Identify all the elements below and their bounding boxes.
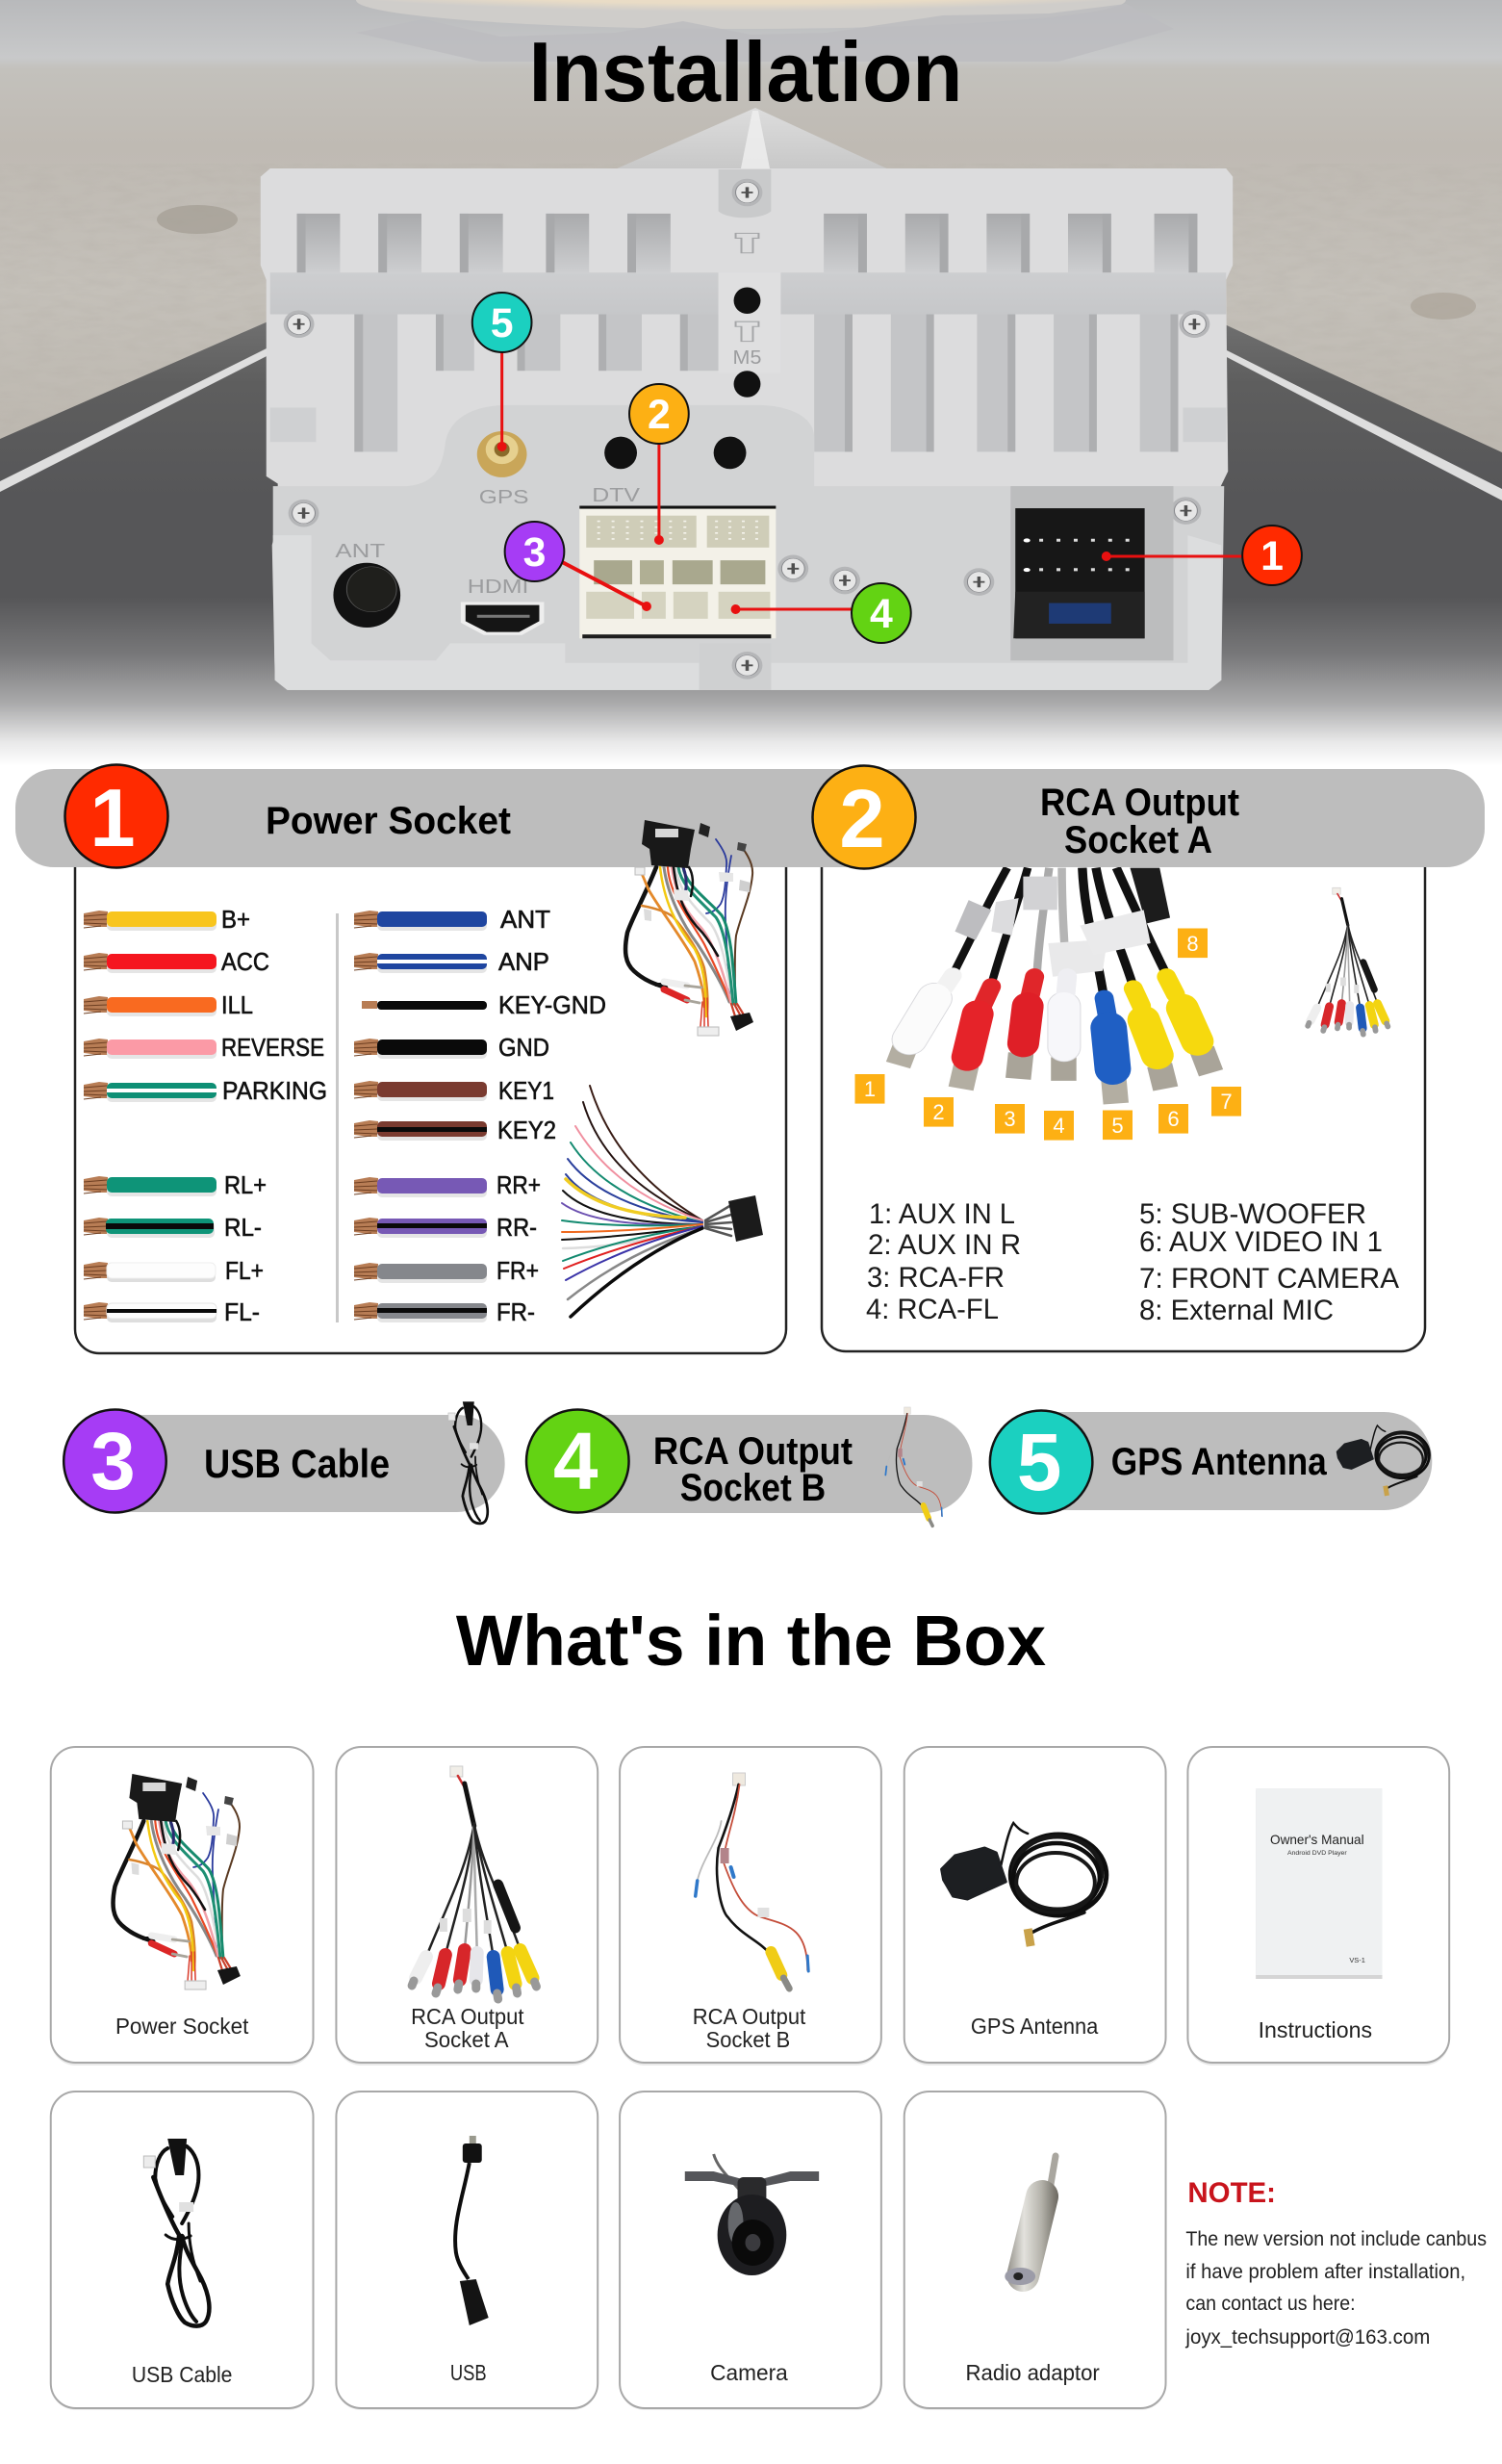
heading: RCA Output Socket A: Socket A bbox=[1064, 819, 1212, 861]
device port labels: ANT bbox=[335, 541, 385, 562]
card: USB Cable bbox=[51, 2092, 314, 2410]
label bbox=[411, 2004, 524, 2052]
photo bbox=[1005, 2156, 1056, 2285]
callout 4: RCA B bbox=[731, 583, 911, 643]
RCA legend: 2: AUX IN R bbox=[868, 1229, 1021, 1261]
card: Power Socket bbox=[51, 1747, 314, 2066]
RCA legend: 7: FRONT CAMERA bbox=[1139, 1263, 1399, 1295]
manual booklet bbox=[1256, 1788, 1383, 1979]
wire labels: FR- bbox=[496, 1297, 535, 1326]
label: Socket A bbox=[424, 2027, 509, 2052]
wire labels: RR- bbox=[496, 1213, 537, 1242]
number tags: 4 bbox=[1053, 1114, 1065, 1138]
label: Camera bbox=[710, 2360, 788, 2385]
section 3: USB Cable: 3 bbox=[90, 1416, 136, 1506]
icon: RCA B cable bbox=[885, 1407, 942, 1526]
wire labels: FR+ bbox=[496, 1256, 539, 1285]
harness fan of wires with connector bbox=[562, 1086, 763, 1317]
RCA legend: 4: RCA-FL bbox=[866, 1294, 999, 1325]
card: Camera bbox=[620, 2092, 881, 2410]
badge 1: 1 bbox=[89, 773, 136, 864]
wire labels: REVERSE bbox=[221, 1033, 324, 1062]
label: Socket B bbox=[706, 2027, 790, 2052]
callout 3: USB bbox=[505, 522, 651, 611]
callout 5: GPS bbox=[472, 293, 532, 451]
socket plate bbox=[273, 405, 1224, 690]
panel: power socket wiring bbox=[75, 861, 786, 1353]
number tags: 5 bbox=[1111, 1114, 1124, 1138]
card: RCA Output Socket B bbox=[620, 1747, 881, 2066]
title: Installation: Installation bbox=[529, 25, 962, 119]
wires: right column bbox=[354, 911, 487, 1322]
callout 1: power: 1 bbox=[1260, 533, 1284, 579]
card: USB bbox=[336, 2092, 598, 2410]
wire labels: FL- bbox=[224, 1297, 260, 1326]
RCA legend: 5: SUB-WOOFER bbox=[1139, 1198, 1366, 1230]
number tags: 3 bbox=[1004, 1107, 1016, 1131]
header bar: sections 1 and 2 bbox=[15, 764, 1485, 868]
heading: RCA Output Socket A bbox=[1040, 782, 1239, 861]
manual booklet: Owner's Manual bbox=[1270, 1833, 1364, 1847]
callout 4: RCA B: 4 bbox=[870, 591, 893, 637]
RCA legend: 1: AUX IN L bbox=[869, 1198, 1015, 1230]
photo bbox=[143, 2139, 209, 2326]
section 4: RCA Output Socket B: Socket B bbox=[680, 1467, 826, 1509]
photo bbox=[455, 2136, 489, 2325]
ANT port bbox=[333, 563, 400, 628]
manual booklet: VS-1 bbox=[1349, 1956, 1365, 1964]
RCA legend: 3: RCA-FR bbox=[867, 1262, 1005, 1294]
manual booklet: Android DVD Player bbox=[1287, 1850, 1348, 1857]
label: GPS Antenna bbox=[971, 2014, 1099, 2039]
photo bbox=[685, 2154, 819, 2275]
device port labels: HDMI bbox=[468, 577, 529, 598]
wire labels bbox=[221, 905, 606, 1326]
wire labels: B+ bbox=[221, 905, 250, 934]
number tags: 8 bbox=[1186, 932, 1199, 956]
wire labels: KEY-GND bbox=[498, 990, 606, 1019]
panel: RCA output socket A bbox=[822, 861, 1425, 1351]
card: Radio adaptor bbox=[904, 2092, 1166, 2410]
number tags: 1 bbox=[864, 1077, 876, 1101]
wire labels: RL- bbox=[224, 1213, 262, 1242]
callout 1: power bbox=[1102, 526, 1302, 585]
section 3: USB Cable: USB Cable bbox=[204, 1441, 390, 1486]
section 5: GPS Antenna: GPS Antenna bbox=[1111, 1441, 1327, 1483]
divider bbox=[336, 913, 339, 1322]
heading: Power Socket: Power Socket bbox=[266, 800, 511, 842]
photo bbox=[696, 1773, 808, 1989]
RCA legend: 8: External MIC bbox=[1139, 1295, 1334, 1326]
icon: USB cable bbox=[448, 1401, 488, 1524]
harness photo overlapping bar bbox=[625, 820, 753, 1036]
number tags: 7 bbox=[1220, 1090, 1233, 1114]
background: road scene bbox=[0, 0, 1502, 775]
title: What's in the Box: What's in the Box bbox=[456, 1601, 1046, 1681]
device port labels: GPS bbox=[479, 487, 529, 508]
callout 2: RCA A: 2 bbox=[648, 392, 671, 438]
photo bbox=[412, 1766, 536, 1999]
power socket (black) bbox=[1010, 486, 1173, 660]
section 3: USB Cable bbox=[64, 1401, 505, 1524]
wire labels: ILL bbox=[221, 990, 253, 1019]
callout 3: USB: 3 bbox=[523, 529, 546, 576]
wire labels: KEY1 bbox=[498, 1076, 554, 1105]
heading: RCA Output Socket A: RCA Output bbox=[1040, 782, 1239, 824]
note text: The new version not include canbus bbox=[1185, 2228, 1487, 2250]
wires: left column bbox=[84, 911, 216, 1322]
label: Instructions bbox=[1259, 2017, 1372, 2042]
note text: if have problem after installation, bbox=[1185, 2261, 1465, 2283]
centre strip with holes bbox=[719, 169, 780, 398]
wire labels: RR+ bbox=[496, 1170, 541, 1199]
wire labels: RL+ bbox=[224, 1170, 267, 1199]
number tags bbox=[854, 928, 1241, 1141]
HDMI port bbox=[461, 603, 544, 635]
device port labels: M5 bbox=[733, 347, 761, 369]
device: head unit rear panel bbox=[261, 168, 1233, 690]
fins: recessed band and top comb bbox=[270, 214, 1226, 315]
section 4: RCA Output Socket B: 4 bbox=[553, 1416, 598, 1506]
number tags: 6 bbox=[1167, 1107, 1180, 1131]
section 5: GPS Antenna bbox=[990, 1411, 1432, 1513]
badge 1 bbox=[65, 764, 167, 868]
card: GPS Antenna bbox=[904, 1747, 1166, 2066]
screws bbox=[284, 179, 1209, 680]
icon: GPS antenna bbox=[1337, 1425, 1429, 1496]
wire labels: ACC bbox=[221, 947, 269, 976]
callout 5: GPS: 5 bbox=[491, 300, 514, 346]
GPS connector bbox=[477, 431, 527, 477]
label: USB bbox=[450, 2360, 487, 2385]
RCA legend: 6: AUX VIDEO IN 1 bbox=[1139, 1226, 1383, 1258]
callout 2: RCA A bbox=[629, 384, 689, 545]
badge 2 bbox=[812, 766, 916, 868]
RCA plugs photo bbox=[898, 868, 1211, 1104]
note text bbox=[1184, 2228, 1487, 2348]
photo bbox=[942, 1823, 1107, 1946]
photo bbox=[114, 1774, 241, 1989]
section 5: GPS Antenna: 5 bbox=[1017, 1417, 1061, 1507]
wire labels: ANT bbox=[500, 905, 550, 934]
wire labels: ANP bbox=[498, 947, 549, 976]
note text: can contact us here: bbox=[1185, 2293, 1356, 2315]
card: RCA Output Socket A bbox=[336, 1747, 598, 2066]
wire labels: KEY2 bbox=[497, 1116, 556, 1144]
label: Radio adaptor bbox=[965, 2360, 1100, 2385]
thumbnail RCA cable bbox=[1308, 887, 1387, 1035]
label: USB Cable bbox=[132, 2362, 232, 2387]
wire labels: GND bbox=[498, 1033, 549, 1062]
device port labels: DTV bbox=[592, 485, 641, 506]
number tags: 2 bbox=[932, 1100, 945, 1124]
wire labels: PARKING bbox=[222, 1076, 327, 1105]
wire labels: FL+ bbox=[225, 1256, 264, 1285]
section 4: RCA Output Socket B bbox=[526, 1407, 972, 1526]
label: RCA Output bbox=[411, 2004, 524, 2029]
card: Instructions bbox=[1187, 1747, 1449, 2066]
badge 2: 2 bbox=[839, 774, 885, 865]
note text: joyx_techsupport@163.com bbox=[1184, 2326, 1430, 2348]
label: RCA Output bbox=[693, 2004, 806, 2029]
RCA legend bbox=[866, 1198, 1399, 1326]
device port labels bbox=[335, 347, 761, 598]
section 4: RCA Output Socket B: RCA Output bbox=[653, 1430, 853, 1473]
label bbox=[693, 2004, 806, 2052]
label: Power Socket bbox=[115, 2014, 249, 2039]
fins: lower comb bbox=[270, 315, 1226, 451]
note heading: NOTE: bbox=[1187, 2177, 1276, 2209]
DTV white socket bbox=[579, 506, 776, 638]
